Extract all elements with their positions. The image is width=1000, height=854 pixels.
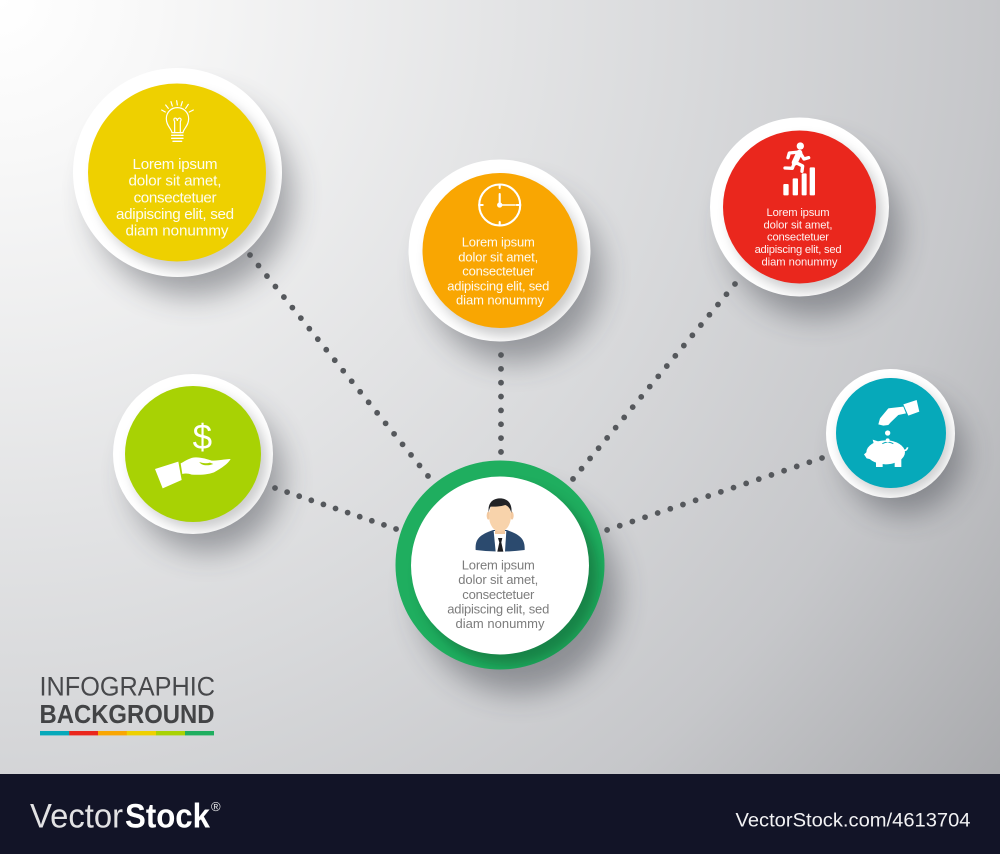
text: orange circle copy: dolor sit amet, — [458, 249, 538, 264]
panel: orange time circle — [408, 160, 590, 342]
footer logo: ® — [211, 799, 221, 814]
colour strip — [40, 731, 214, 735]
text: orange circle copy: consectetuer — [462, 264, 535, 279]
icon: dollar over open hand — [155, 418, 231, 488]
panel: central person circle — [396, 460, 604, 670]
text: red circle copy: diam nonummy — [762, 256, 838, 268]
heading: infographic: INFOGRAPHIC — [40, 672, 215, 702]
text: yellow circle copy: diam nonummy — [126, 223, 229, 240]
text: red circle copy: dolor sit amet, — [763, 219, 832, 231]
icon: businessman — [476, 498, 525, 552]
icon: runner on rising bars — [783, 142, 815, 195]
dotted connectors — [250, 255, 822, 530]
panel: teal savings circle — [826, 369, 955, 498]
heading: background: BACKGROUND — [40, 701, 214, 729]
panel: red growth circle — [710, 118, 889, 296]
icon: hand dropping coin into piggy bank — [864, 400, 919, 467]
text: orange circle copy: Lorem ipsum — [462, 235, 535, 250]
panel: lime money circle — [113, 374, 273, 534]
footer bar — [0, 774, 1000, 854]
text: orange circle copy: diam nonummy — [456, 293, 544, 308]
text: red circle copy: Lorem ipsum — [767, 207, 830, 219]
footer image id: VectorStock.com/4613704 — [736, 811, 971, 832]
text: central circle copy: diam nonummy — [456, 616, 545, 631]
footer logo: Vector — [30, 798, 123, 836]
text: red circle copy: adipiscing elit, sed — [755, 244, 842, 256]
text: yellow circle copy: consectetuer — [134, 189, 217, 206]
text: central circle copy: dolor sit amet, — [458, 572, 538, 587]
text: red circle copy: consectetuer — [767, 232, 829, 244]
text: orange circle copy: adipiscing elit, sed — [447, 278, 549, 293]
text: central circle copy: Lorem ipsum — [462, 557, 535, 572]
footer logo: Stock — [125, 798, 210, 836]
icon: light bulb — [162, 101, 193, 141]
text: yellow circle copy: Lorem ipsum — [133, 156, 218, 173]
icon: dollar over open hand: $ — [193, 418, 212, 457]
footer logo — [30, 798, 221, 836]
text: central circle copy: consectetuer — [462, 587, 535, 602]
text: central circle copy: adipiscing elit, sed — [447, 601, 549, 616]
panel: yellow idea circle — [73, 68, 282, 277]
text: yellow circle copy: adipiscing elit, sed — [116, 206, 234, 223]
icon: clock — [479, 184, 520, 226]
text: yellow circle copy: dolor sit amet, — [128, 173, 221, 190]
title block — [40, 672, 215, 735]
